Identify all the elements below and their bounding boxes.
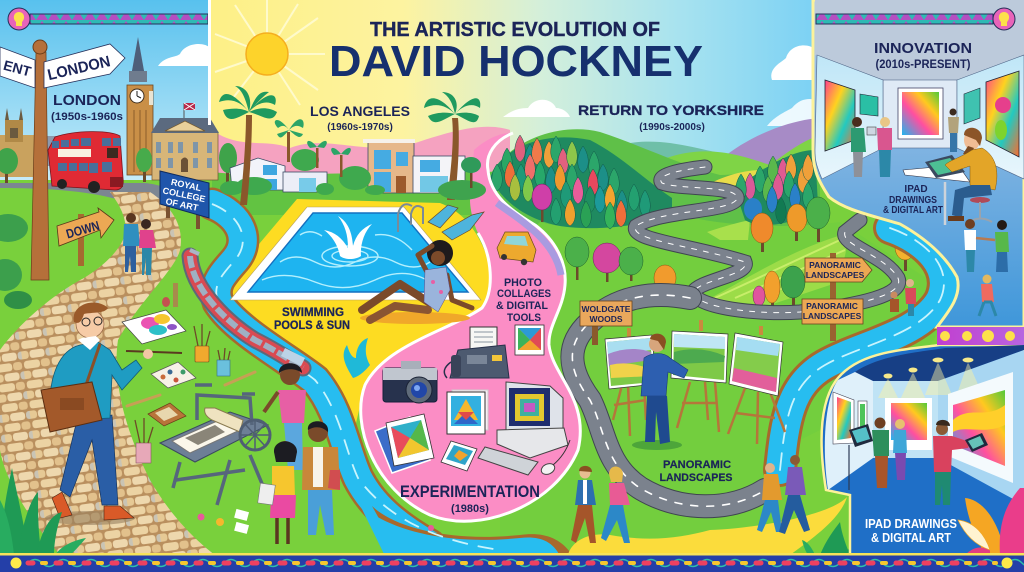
flag [184,103,195,120]
panel: innovation gallery [813,0,1024,327]
heading: Los Angeles: (1960s-1970s) [327,122,393,133]
hikers near river [890,279,916,316]
signpost: Panoramic Landscapes: LANDSCAPES [806,270,865,280]
panel background [813,0,1024,327]
signpost: Panoramic Landscapes: LANDSCAPES [803,311,862,321]
title: DAVID HOCKNEY [329,37,703,86]
heading: London [51,92,123,123]
green man with tablet [849,418,889,490]
sun [215,0,325,105]
panel background [822,345,1024,555]
swimming pool [230,204,481,300]
sign pointing left [0,47,35,88]
train [190,250,303,368]
heading: innovation: (2010s-PRESENT) [876,59,971,71]
easel 3 [728,326,785,444]
white outline right [361,133,580,521]
lawn Los Angeles [212,172,500,215]
sweater [50,342,142,420]
colour palette paper [122,310,186,344]
brush jars [135,324,230,463]
fountain [324,216,372,259]
walking girl [979,274,996,316]
back wall [873,381,938,458]
strap [86,344,100,385]
hair [74,303,108,323]
signpost: Panoramic Landscapes: PANORAMIC [806,301,858,311]
label: iPad drawings upper: & DIGITAL ART [883,205,943,216]
heading: Los Angeles [310,103,410,133]
bushes [220,149,385,195]
pink experimentation zone [361,133,580,521]
bottom-right centre plant [802,522,862,555]
man in red with tablet [933,420,988,505]
cobble path [0,192,215,555]
holding hands couple [964,219,1009,272]
easel 2 [671,320,728,432]
photo collages body: TOOLS [507,312,541,324]
hair [427,240,453,266]
bottom gallery paintings [833,372,1013,483]
label: iPad drawings lower: IPAD DRAWINGS [865,517,957,531]
walkers: right couple [757,455,810,534]
yellow car [497,232,536,265]
road London [0,183,175,200]
sign: Royal College of Art: ROYAL [170,177,203,193]
house right [363,139,465,193]
legs [362,284,430,310]
collar [78,336,100,350]
pink hills Los Angeles [212,127,510,200]
winding road [572,167,899,506]
label: swimming pools and sun: SWIMMING [282,307,344,319]
photo collages body: COLLAGES [497,288,551,300]
panel: iPad drawings gallery [822,327,1024,555]
purple light band [937,327,1024,345]
forest backdrop [490,137,672,228]
plant right bottom [958,488,1024,555]
lamps [878,357,985,400]
palm trees [219,86,480,205]
sign post [0,40,125,280]
label: iPad drawings upper: DRAWINGS [889,195,937,206]
bottom-left plant [0,468,86,555]
heading: experimentation: EXPERIMENTATION [400,482,540,501]
fax machine [444,327,509,378]
heading: photo collages: PHOTO [504,277,542,289]
river left [212,204,430,545]
river mouth [212,204,570,556]
label: panoramic landscapes [660,459,732,484]
sky centre with yellow to blue fade [208,0,818,220]
main hill [490,129,820,330]
yellow sand zone [222,199,491,440]
castle [0,108,58,177]
back teal hill [620,142,730,185]
purple hill [720,118,820,175]
paint box [151,362,196,388]
heading: experimentation: (1980s) [451,503,489,515]
legs [60,415,118,505]
gallery paintings [825,71,1019,157]
man brown jacket [302,421,340,535]
band lights [940,330,1015,342]
label: panoramic landscapes: PANORAMIC [663,459,731,471]
top border right [816,8,1015,30]
painter [632,334,688,450]
students at the press [258,363,340,544]
woman in gallery [893,419,907,480]
ladder [398,204,423,232]
photo collages body [496,288,551,324]
label: iPad drawings upper: IPAD [904,184,928,195]
swimsuit [424,267,450,312]
water splash [344,338,370,378]
sign pointing to London: LONDON [46,53,112,84]
top border left [8,8,208,30]
sky left [0,0,210,200]
sign: Down: DOWN [64,218,101,242]
magenta round tree in forest [532,184,552,222]
shoes [52,492,72,518]
bush left [0,214,32,309]
glasses [82,317,102,326]
computer [478,382,570,476]
left wall [815,55,883,179]
deck chairs [428,205,484,240]
ceiling [855,345,1024,381]
striped fields [703,170,846,305]
signpost: Panoramic Landscapes: PANORAMIC [809,260,861,270]
heading: innovation: INNOVATION [874,40,972,57]
sign: Woldgate Woods [580,301,632,345]
label: panoramic landscapes: LANDSCAPES [660,472,732,484]
bottom border [0,553,1024,572]
yellow path bottom right [568,497,847,555]
red double decker bus [48,132,123,193]
title: THE ARTISTIC EVOLUTION OF [370,19,660,41]
wooden block [148,403,186,426]
polaroid stack [375,414,434,473]
sign: Down [57,208,114,266]
pencils [127,283,255,406]
label: iPad drawings upper [883,184,943,216]
heading: experimentation [400,482,540,515]
figure: young Hockney [41,303,182,525]
label: swimming pools and sun [274,307,350,332]
green back hill [650,135,820,240]
right forest [735,150,818,225]
art supplies [122,283,255,463]
polaroid centre [447,390,488,434]
house left [230,158,327,192]
label: swimming pools and sun: POOLS & SUN [274,320,350,332]
Hills and forest: Yorkshire [490,118,960,555]
ceiling [815,0,1024,80]
vertical divider glow [208,0,211,125]
sign: Royal College of Art: COLLEGE [162,185,206,204]
heading: innovation [874,40,972,71]
small flowers [198,509,434,534]
head [431,251,445,265]
lavender stripe [497,203,561,275]
shadow [360,312,470,324]
trees by skyline [0,143,237,185]
Royal College building [151,118,219,180]
walkers: left couple [571,466,630,543]
heading: Return to Yorkshire: RETURN TO YORKSHIRE [578,102,764,118]
woman by pool [360,240,472,324]
clouds [158,44,816,126]
lower hill [500,215,960,555]
paint brush [126,351,182,353]
Big Ben [127,37,153,175]
label: iPad drawings lower: & DIGITAL ART [871,531,951,545]
visitors [851,108,959,177]
sign pointing left: ENT [2,57,33,80]
right wall [957,55,1024,179]
satchel [41,382,102,432]
river right [780,228,944,470]
printing press [160,385,270,505]
easel 1 [605,328,656,436]
rounded trees [565,197,915,314]
photo collages body: & DIGITAL [496,300,548,312]
extra bushes and tree [438,157,486,200]
artist at table [903,128,997,225]
scene: painter with easels [605,320,785,450]
head [76,310,104,338]
ground base [0,180,1024,556]
heading: London: (1950s-1960s [51,111,123,123]
small card [441,441,477,471]
sign pointing to London [44,44,125,88]
camera [383,361,437,403]
scene: London skyline [0,37,237,185]
heading: Los Angeles: LOS ANGELES [310,103,410,119]
sign: Woldgate Woods: WOLDGATE [582,304,631,314]
signpost: Panoramic Landscapes [802,253,872,341]
couple on cobble path [123,213,156,275]
arms [447,275,472,308]
girl yellow top [258,441,297,544]
heading: Return to Yorkshire [578,102,764,133]
Los Angeles houses [220,139,465,195]
shadow [45,511,135,525]
colourful print card [515,325,544,355]
left wall [825,372,873,490]
heading: London: LONDON [53,92,121,109]
heading: Return to Yorkshire: (1990s-2000s) [639,122,705,133]
sign: Royal College of Art [160,171,209,229]
sign: Royal College of Art: OF ART [165,196,200,213]
label: iPad drawings lower [865,517,957,545]
back wall [883,80,957,148]
forest trees [492,135,650,229]
right wall [938,350,1024,505]
sign: Woldgate Woods: WOODS [589,314,623,324]
boy pink shirt [264,363,306,470]
